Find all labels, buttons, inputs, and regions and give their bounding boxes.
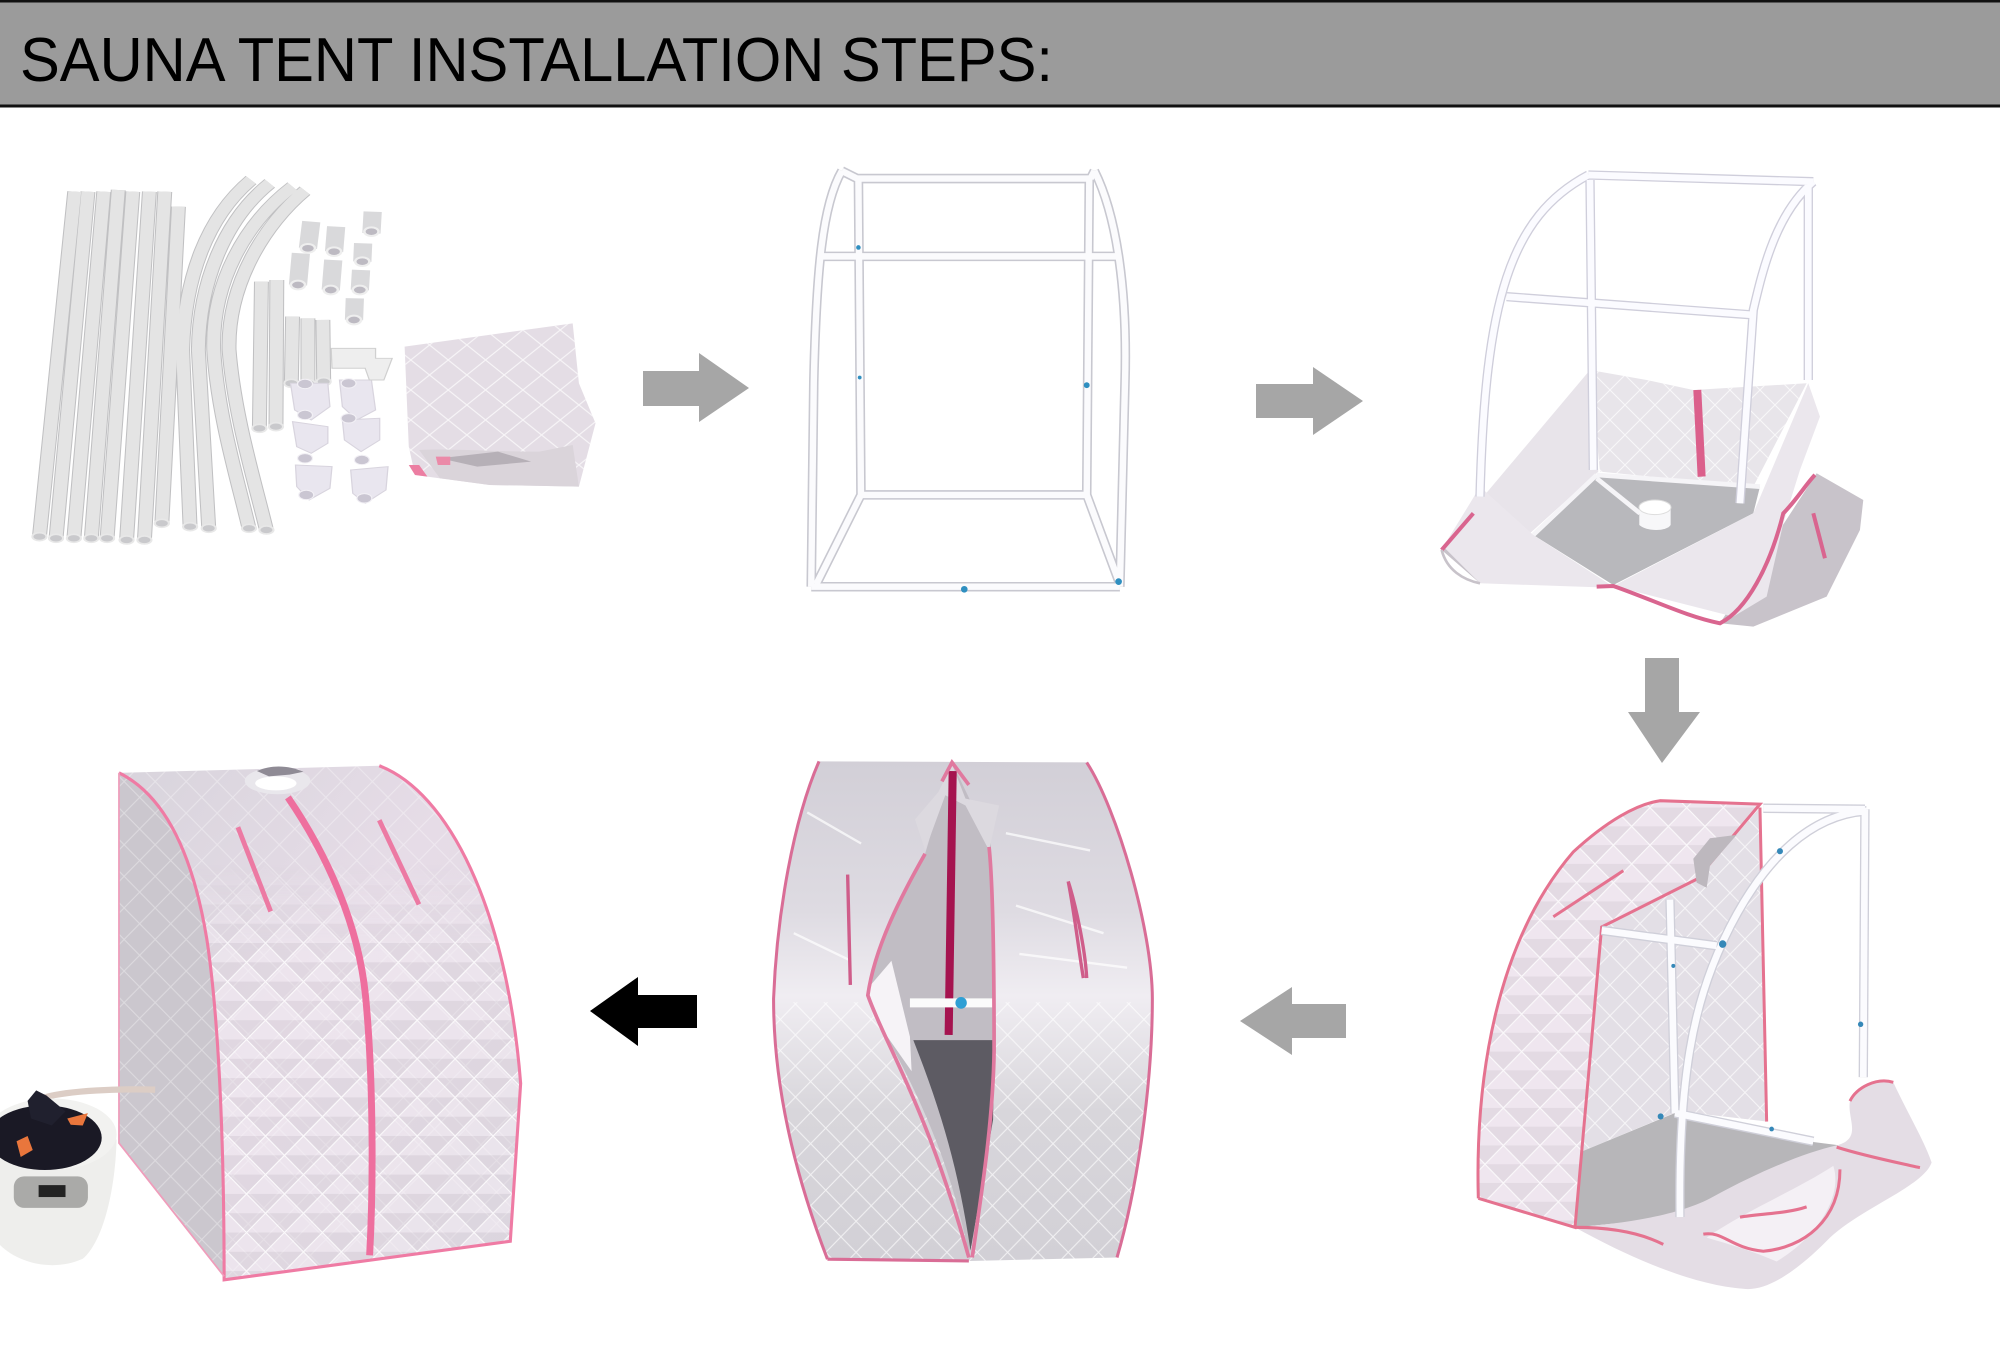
black lid [0, 1105, 102, 1170]
frame tubes [811, 171, 1125, 587]
arrow 5, left, black [590, 977, 697, 1046]
centre zipper [288, 797, 372, 1255]
outer quilted panel [1478, 801, 1760, 1227]
bottom flap [1575, 1081, 1932, 1289]
inside wall [1580, 808, 1767, 1152]
title: SAUNA TENT INSTALLATION STEPS: [20, 26, 1053, 95]
white door lining [868, 961, 912, 1071]
cover body [774, 761, 1152, 1261]
step 2: assembled frame [811, 171, 1125, 593]
arm slits [238, 820, 419, 911]
pink outer edge [774, 761, 1152, 1261]
frame tubes [1480, 175, 1813, 503]
control panel [14, 1176, 88, 1208]
right flap [1613, 383, 1820, 617]
pink piping [1478, 801, 1767, 1227]
cross bar [910, 990, 992, 1016]
front panel [119, 766, 521, 1280]
blue clip [955, 997, 967, 1009]
left flap [1443, 487, 1613, 587]
door opening interior [868, 762, 994, 1254]
steamer [0, 1090, 117, 1265]
arrow 3, down [1628, 658, 1700, 763]
step 5: cover fully on, door open [774, 761, 1152, 1261]
pipes [32, 180, 331, 544]
step 3: frame with cover spread on the floor [1442, 175, 1863, 627]
arrow 1 [643, 353, 749, 422]
pink back strap [1697, 390, 1702, 477]
back wall [1590, 370, 1807, 487]
floor [1575, 1113, 1840, 1227]
lid knob [28, 1090, 66, 1125]
small fittings [331, 348, 392, 380]
left wall [1483, 370, 1598, 533]
display [39, 1185, 66, 1197]
title banner [0, 0, 2000, 108]
step 4: cover half pulled over frame [1478, 801, 1932, 1289]
floor tubes [1533, 475, 1760, 535]
door zipper edges [868, 762, 994, 1258]
step 6: finished sauna tent with steamer [0, 766, 521, 1280]
frame tubes [1602, 808, 1867, 1217]
pink edging [119, 766, 521, 1280]
blue clips [1658, 848, 1863, 1131]
step 1: pipes, connectors and folded cover [32, 180, 596, 544]
water pot [1639, 500, 1671, 530]
roof vent [245, 766, 310, 794]
vent [1693, 835, 1737, 888]
arrow 2 [1256, 367, 1363, 435]
dark floor [913, 1040, 994, 1251]
grey floor [1533, 475, 1760, 585]
outer grey fabric [1442, 473, 1863, 627]
steam hose [45, 1089, 155, 1097]
orange latches [17, 1113, 88, 1157]
pink hem [1442, 475, 1825, 623]
blue frame clips [856, 245, 1122, 593]
three-way connectors [290, 379, 388, 503]
arm slots [848, 875, 1087, 985]
fabric creases [794, 812, 1127, 968]
side panel [119, 773, 224, 1276]
crimson back strip [949, 771, 953, 1035]
couplers [291, 212, 378, 324]
side edges pale [119, 773, 224, 1276]
vent folds [915, 764, 999, 850]
folded cover [405, 323, 596, 487]
hem pink lower edge [1442, 550, 1480, 583]
arrow 4, left [1240, 987, 1346, 1055]
